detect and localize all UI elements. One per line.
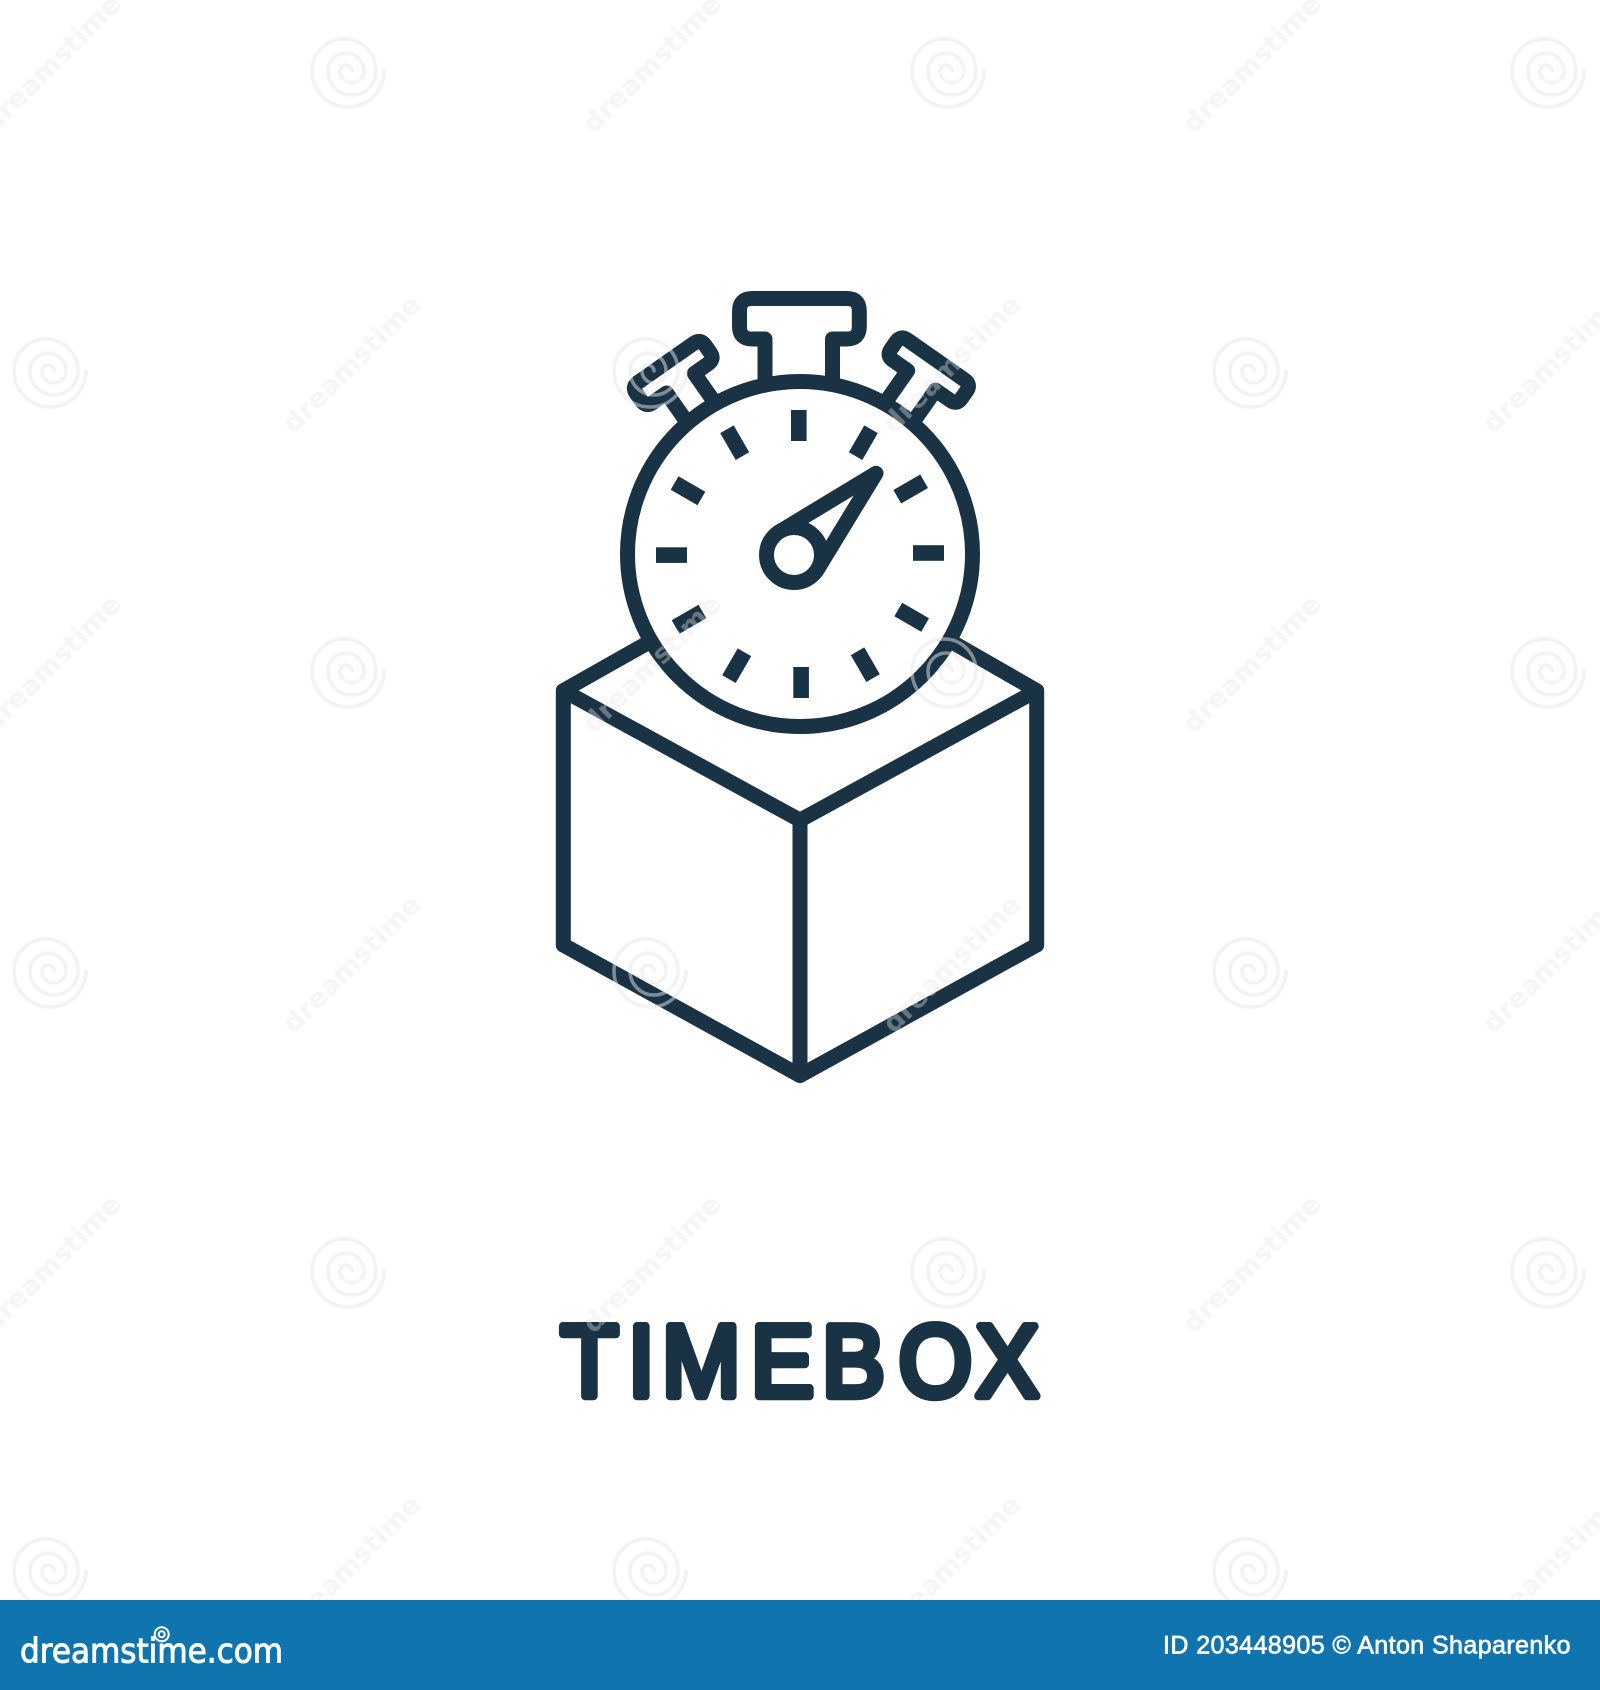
title: TIMEBOX (561, 1305, 1039, 1418)
footer image credit: ID 203448905 © Anton Shaparenko (1163, 1631, 1570, 1659)
icon: stopwatch on a box (563, 298, 1037, 1076)
watermark pattern: dreamstime (1177, 1189, 1327, 1339)
icon part: stopwatch top button (740, 298, 859, 382)
icon part: stopwatch right button (862, 335, 971, 440)
watermark pattern: dreamstime (1177, 589, 1327, 739)
icon part: stopwatch dial ring (628, 382, 972, 726)
footer logo wordmark: dreamstime.com (20, 1632, 283, 1672)
watermark pattern: dreamstime (877, 1489, 1027, 1639)
watermark pattern: dreamstime (577, 1189, 727, 1339)
icon part: isometric box (563, 638, 1037, 1076)
watermark pattern: dreamstime (877, 289, 1027, 439)
watermark pattern: dreamstime (277, 289, 427, 439)
watermark pattern: dreamstime (577, 589, 727, 739)
watermark pattern: dreamstime (877, 889, 1027, 1039)
watermark pattern: dreamstime (277, 1489, 427, 1639)
watermark pattern: dreamstime (277, 889, 427, 1039)
icon part: stopwatch left button (632, 339, 737, 440)
footer bar (0, 1600, 1600, 1690)
icon: logo spiral (155, 1627, 169, 1641)
icon part: stopwatch needle (766, 473, 876, 582)
icon part: dial tick marks (656, 410, 944, 698)
